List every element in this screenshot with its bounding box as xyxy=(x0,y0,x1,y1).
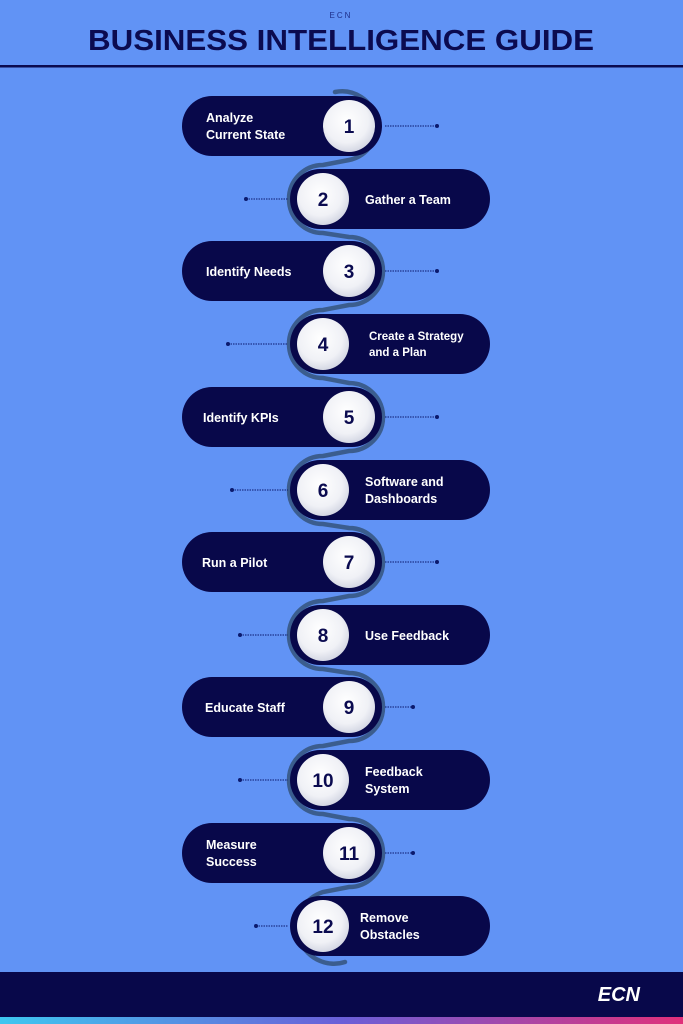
step 4: 4 xyxy=(318,335,329,356)
step 6: 6 xyxy=(318,481,328,502)
step 6: Software and xyxy=(365,475,444,489)
step 9: 9 xyxy=(344,698,354,719)
step 9: Educate Staff xyxy=(205,701,286,715)
step 7: Run a Pilot xyxy=(202,556,268,570)
connector curve xyxy=(289,91,383,964)
step 10 xyxy=(238,750,490,810)
step 12: 12 xyxy=(312,917,334,938)
step 3: Identify Needs xyxy=(206,265,291,279)
step 1: Analyze xyxy=(206,111,253,125)
step 4: Create a Strategy xyxy=(369,331,464,343)
brand label: ECN xyxy=(330,11,352,20)
step 11: Measure xyxy=(206,838,257,852)
step 10: Feedback xyxy=(365,765,423,779)
footer logo: ECN xyxy=(598,984,641,1006)
step 4: and a Plan xyxy=(369,347,427,359)
step 12: Obstacles xyxy=(360,928,420,942)
header xyxy=(88,11,594,57)
step 5 xyxy=(182,387,439,447)
step 12 xyxy=(254,896,490,956)
step 8 xyxy=(238,605,490,665)
step 11 xyxy=(182,823,415,883)
step 2: 2 xyxy=(318,190,328,211)
step 9 xyxy=(182,677,415,737)
step 1: Current State xyxy=(206,128,285,142)
step 10: System xyxy=(365,782,409,796)
step 1: 1 xyxy=(344,117,355,138)
step 1 xyxy=(182,96,439,156)
step 10: 10 xyxy=(312,771,334,792)
step 6: Dashboards xyxy=(365,492,437,506)
step 2: Gather a Team xyxy=(365,193,451,207)
footer xyxy=(0,972,683,1024)
step 7: 7 xyxy=(344,553,354,574)
step 4 xyxy=(226,314,490,374)
step 11: Success xyxy=(206,855,257,869)
step 7 xyxy=(182,532,439,592)
step 5: Identify KPIs xyxy=(203,411,279,425)
step 3: 3 xyxy=(344,262,354,283)
step 8: 8 xyxy=(318,626,328,647)
step 8: Use Feedback xyxy=(365,629,449,643)
step 12: Remove xyxy=(360,911,409,925)
step 6 xyxy=(230,460,490,520)
step 2 xyxy=(244,169,490,229)
step 3 xyxy=(182,241,439,301)
step 11: 11 xyxy=(339,844,359,865)
step 5: 5 xyxy=(344,408,355,429)
title: BUSINESS INTELLIGENCE GUIDE xyxy=(88,25,594,57)
